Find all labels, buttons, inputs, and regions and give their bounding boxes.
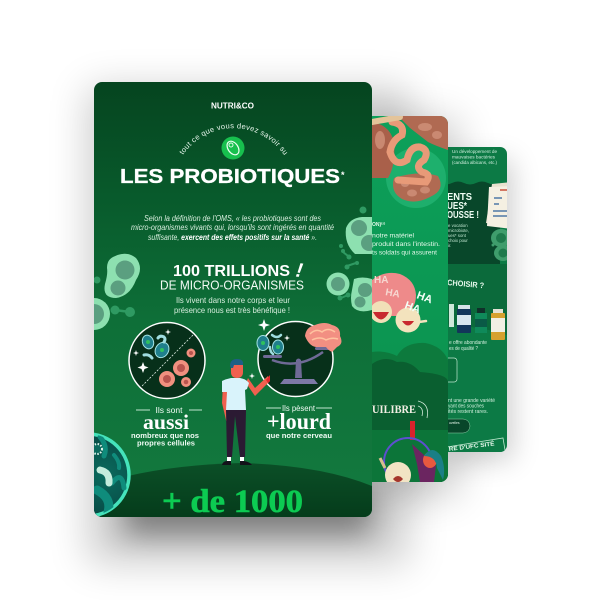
text: section intro: produit dans l'intestin. [372,241,440,248]
illustration: acrobat and hoop [380,421,444,488]
text: offre abondante: e offre abondante [449,340,487,346]
label: aussi nombreux [131,406,202,448]
logo: NUTRI&CO [211,102,254,110]
label: plus lourd: +lourd [267,409,331,434]
banner: UFC: RE D'UFC SITÉ [448,439,495,453]
hand [266,375,270,383]
text: definition: micro-organismes vivants qui, lorsqu'ils sont ingérés en quantité [131,223,334,232]
icon: cells [491,229,507,261]
title: LES PROBIOTIQUES [120,166,340,188]
text: benefit: Ils vivent dans notre corps et leur [176,295,290,305]
socks [227,457,244,461]
label: aussi nombreux: propres cellules [137,438,195,448]
illustration: laughing brain: HA [384,287,401,300]
bacteria on scale [257,335,284,354]
illustration: microbiome circle [47,434,129,516]
text: section intro: ON)⁽²⁾ [372,222,386,228]
head [231,364,243,378]
drop shadows [88,88,512,563]
panel: back card [448,147,507,452]
text: definition [131,214,334,242]
heading: comment choisir: CHOISIR ? [447,278,485,290]
text: grande variété: yant des souches [448,404,484,410]
text: vocation [448,223,469,248]
dark band [448,182,500,264]
text: definition: suffisante, exercent des effets positifs sur la santé ». [148,233,317,242]
scale [263,347,333,384]
icon: supplement bottles [449,304,505,340]
t-shirt [222,378,249,410]
illustration: scale circle [257,319,341,396]
label: plus lourd [266,404,332,440]
heading: équilibre: UILIBRE [372,402,416,416]
icon: document [486,182,507,228]
heading: aliments: ENTS [447,191,472,203]
illustration: laughing brain: HA [374,275,388,286]
subheading: micro-organismes: DE MICRO-ORGANISMES [160,278,304,292]
shoes [222,461,252,465]
illustration: person [222,359,270,465]
text: bad bacteria [452,149,497,165]
text: section intro: notre matériel [372,232,414,240]
text: bad bacteria: Un développement de [452,149,497,154]
text: section intro [372,222,440,256]
label: plus lourd: Ils pèsent [282,404,316,413]
panel: middle card [372,116,448,482]
outlined box [448,358,458,382]
text: offre abondante: es de qualité ? [449,346,478,352]
text: grande variété [448,398,495,413]
icon: cells right [326,206,377,311]
illustration: laughing brain: HA [415,290,434,306]
label: plus lourd: que notre cerveau [266,431,332,440]
illustration: laughing brain: HA [403,300,422,316]
title asterisk: * [341,170,345,180]
text: grande variété: ités restent rares. [448,409,488,415]
text: section intro: ts soldats qui assurent [372,250,437,256]
right arm [246,376,270,396]
text: bad bacteria: mauvaises bactéries [452,154,496,160]
heading: 100 trillions: 100 TRILLIONS [173,263,290,280]
illustration: brain and intestine [372,116,448,202]
label: aussi nombreux: nombreux que nos [131,431,199,440]
dark forest shape [372,343,448,482]
text: vocation: choix pour [448,238,468,243]
arc subtitle [180,123,288,155]
text: offre abondante [449,340,487,352]
label: aussi nombreux: aussi [143,410,189,434]
pants [226,410,246,457]
heading: aliments [448,193,478,218]
heading: aliments: UES* [447,200,468,212]
text: benefit: présence nous est très bénéfique ! [174,305,290,315]
panel: back card: uvelles [449,421,460,425]
heading: aliments: OUSSE ! [447,209,479,221]
sparkle near person [249,373,255,379]
bottle band [448,264,507,335]
text: vocation: microbiote, [448,228,469,233]
big number: + de 1000 [162,484,303,520]
banner: UFC [448,438,506,452]
exclamation mark: ! [294,260,304,282]
text: benefit [174,297,290,314]
hair [230,359,243,368]
illustration: laughing brain [370,273,434,332]
icon: brain [305,323,341,352]
left arm [222,384,230,426]
text: grande variété: nt une grande variété [448,398,495,404]
infographic mockup: three stacked cards [70,70,525,581]
icon: cells left [94,254,140,330]
text: bad bacteria: (candida albicans, etc.) [452,160,497,165]
hill [94,463,372,517]
text: vocation: ues* sont [448,233,467,238]
icon: probiotic badge [222,136,244,160]
illustration: bacteria vs cells circle [129,322,205,398]
text: vocation: e vocation [448,223,468,228]
label: aussi nombreux: Ils sont [156,406,183,415]
panel: front card [94,82,372,517]
icon: signal lines [418,401,428,418]
button pill [448,418,470,434]
light circle [386,148,446,208]
text: vocation: ir. [448,243,451,248]
text: definition: Selon la définition de l'OMS, « les probiotiques sont des [144,214,321,223]
